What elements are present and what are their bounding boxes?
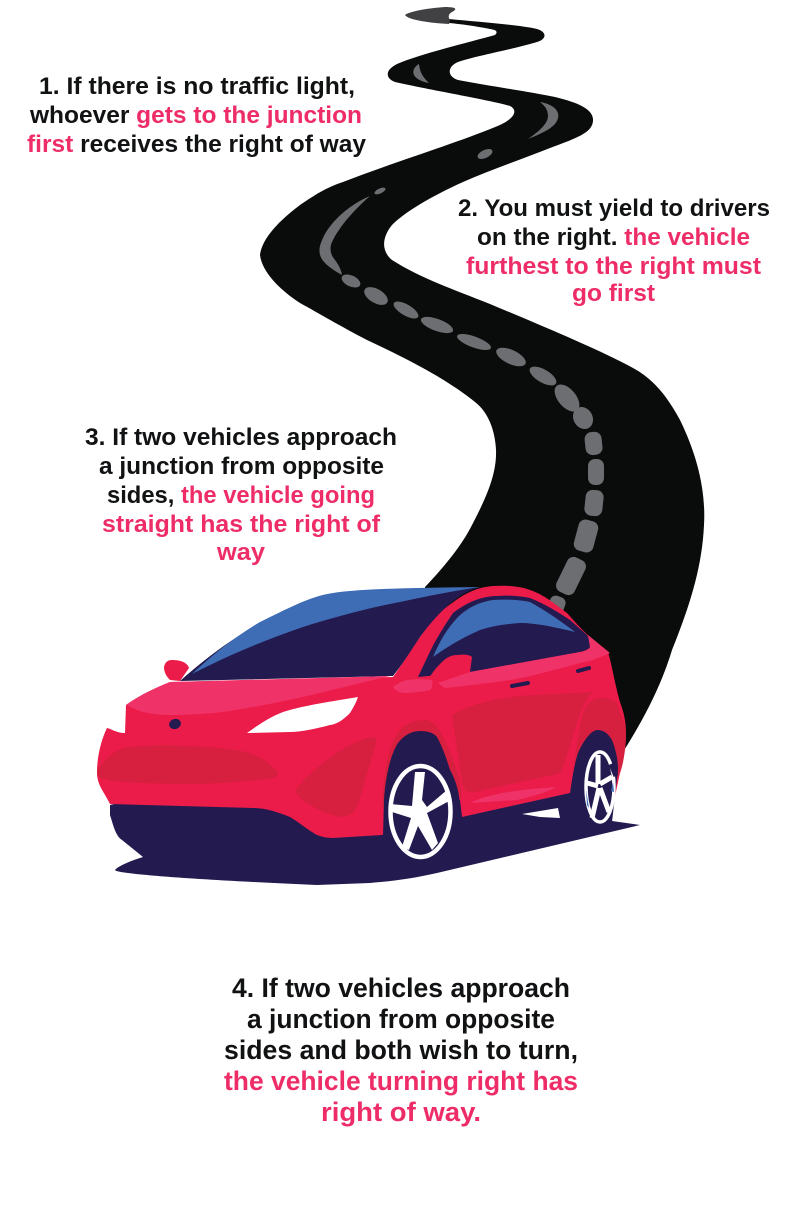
door handles [512,668,589,686]
rule 1 text: whoever gets to the junction [29,102,362,129]
front wheel [390,766,451,857]
rule 4 text: the vehicle turning right has [224,1066,578,1096]
mirror: left [164,660,189,681]
rule 2 text [458,195,770,307]
rule 4 text [224,973,578,1127]
side vent [295,737,377,817]
rule 4 text: 4. If two vehicles approach [232,973,570,1003]
front wheel well [383,731,462,850]
rule 2 text: on the right. the vehicle [477,224,750,251]
car body [97,586,626,838]
rule 1 text [27,73,367,158]
windscreen reflection [192,587,480,674]
front wheel arch [382,720,462,810]
fender highlight [393,679,432,693]
rule 4 text: right of way. [321,1097,481,1127]
side window frame [418,596,590,677]
rule 3 text [85,424,397,566]
rule 3 text: sides, the vehicle going [107,482,375,509]
rule 3 text: way [216,539,266,566]
windscreen [180,587,480,681]
ground shadow [110,740,640,885]
rule 3 text: a junction from opposite [99,453,384,480]
front badge [168,717,182,731]
rule 3 text: straight has the right of [102,511,381,538]
headlight [247,697,358,733]
rule 3 text: 3. If two vehicles approach [85,424,397,451]
rule 4 text: a junction from opposite [247,1004,555,1034]
rule 2 text: 2. You must yield to drivers [458,195,770,222]
rule 1 text: first receives the right of way [27,131,367,158]
door panel [452,692,593,793]
rear wheel arch [573,698,626,790]
distant road end [405,7,455,24]
rule 2 text: go first [572,280,655,307]
side mirror [427,655,472,682]
rule 4 text: sides and both wish to turn, [224,1035,578,1065]
belt line highlight [438,635,610,688]
grille [97,745,278,784]
hood [126,676,390,715]
sill highlight [470,787,557,803]
red car [97,586,640,885]
rule 2 text: furthest to the right must [466,253,761,280]
road centre markings [319,64,604,620]
rear wheel [586,752,616,822]
road surface [260,19,704,760]
rear wheel well [570,730,618,830]
side window reflection [433,600,575,657]
winding road [260,7,704,760]
ground glint [522,808,560,818]
rule 1 text: 1. If there is no traffic light, [39,73,355,100]
